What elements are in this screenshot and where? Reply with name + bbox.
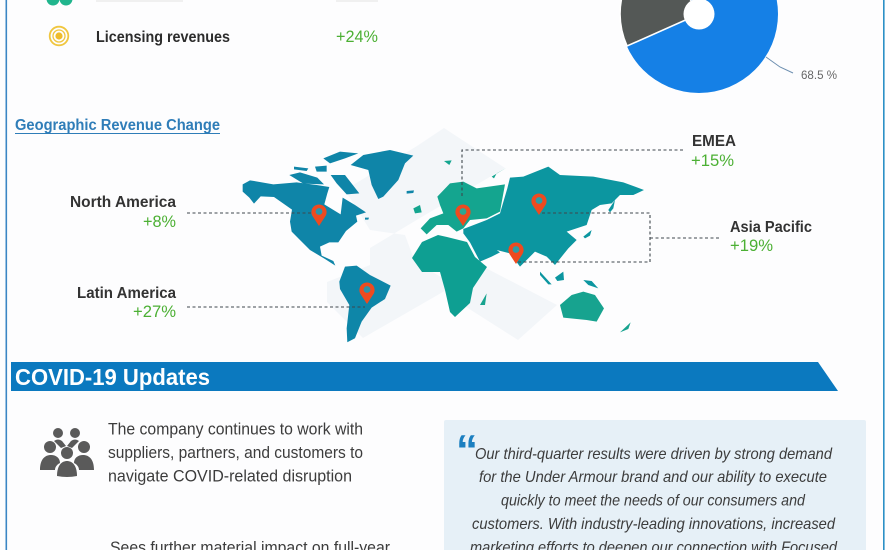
text: supplier collaboration: suppliers, partners, and customers to bbox=[108, 444, 363, 462]
revenue category list bbox=[46, 0, 378, 46]
map: africa bbox=[412, 235, 487, 317]
donut gray segment bbox=[620, 0, 699, 46]
region label: latin america: +27% bbox=[133, 303, 176, 321]
quote text: Our third-quarter results were driven by strong demand bbox=[475, 446, 833, 463]
region label: asia pacific: Asia Pacific bbox=[730, 219, 812, 236]
leader line bbox=[766, 57, 793, 73]
heading: geographic revenue change: Geographic Revenue Change bbox=[15, 117, 220, 134]
text: supplier collaboration: The company continues to work with bbox=[108, 420, 363, 438]
donut value label: 68.5 % bbox=[801, 68, 837, 82]
text: supplier collaboration bbox=[108, 420, 363, 486]
donut hole bbox=[684, 0, 714, 30]
quote text: customers. With industry-leading innovations, increased bbox=[472, 516, 836, 533]
pin: europe bbox=[455, 204, 471, 226]
world map bbox=[187, 128, 720, 342]
region label: asia pacific bbox=[730, 219, 812, 255]
region label: latin america: Latin America bbox=[77, 285, 176, 302]
map: north america bbox=[243, 150, 414, 266]
pin: latin america bbox=[359, 282, 375, 304]
label: licensing revenues: Licensing revenues bbox=[96, 29, 230, 46]
region label: north america: +8% bbox=[143, 213, 176, 231]
connector lines bbox=[187, 150, 720, 307]
region label: emea bbox=[691, 133, 736, 170]
pin: north america bbox=[311, 204, 327, 226]
icon: cropped green dots bbox=[46, 0, 72, 6]
icon: yellow target bbox=[50, 27, 68, 45]
map: greenland bbox=[351, 150, 413, 199]
region label: latin america bbox=[77, 285, 176, 321]
donut chart bbox=[620, 0, 837, 93]
panel: quote bbox=[444, 420, 866, 550]
quote text bbox=[470, 446, 838, 550]
map: south america bbox=[339, 266, 391, 342]
map: australia bbox=[480, 292, 631, 332]
quote text: for the Under Armour brand and our ability to execute bbox=[479, 469, 827, 486]
cropped faded row bbox=[96, 0, 378, 2]
quote text: quickly to meet the needs of our consumers and bbox=[501, 492, 806, 510]
text: supplier collaboration: navigate COVID-related disruption bbox=[108, 468, 352, 486]
region label: north america bbox=[70, 194, 176, 231]
icon: group of people bbox=[40, 428, 94, 477]
region label: north america: North America bbox=[70, 194, 176, 211]
map: asia bbox=[463, 167, 644, 288]
pin: central asia bbox=[531, 193, 547, 215]
banner: covid-19 updates: COVID-19 Updates bbox=[15, 364, 210, 390]
region label: emea: EMEA bbox=[692, 133, 736, 150]
value: licensing change: +24% bbox=[336, 28, 378, 46]
banner: covid-19 updates bbox=[11, 362, 838, 391]
donut blue segment bbox=[620, 0, 778, 93]
icon: quotation mark: “ bbox=[456, 426, 478, 475]
region label: emea: +15% bbox=[691, 152, 734, 170]
region label: asia pacific: +19% bbox=[730, 237, 773, 255]
pin: south asia bbox=[508, 242, 524, 264]
map: europe bbox=[413, 160, 507, 234]
